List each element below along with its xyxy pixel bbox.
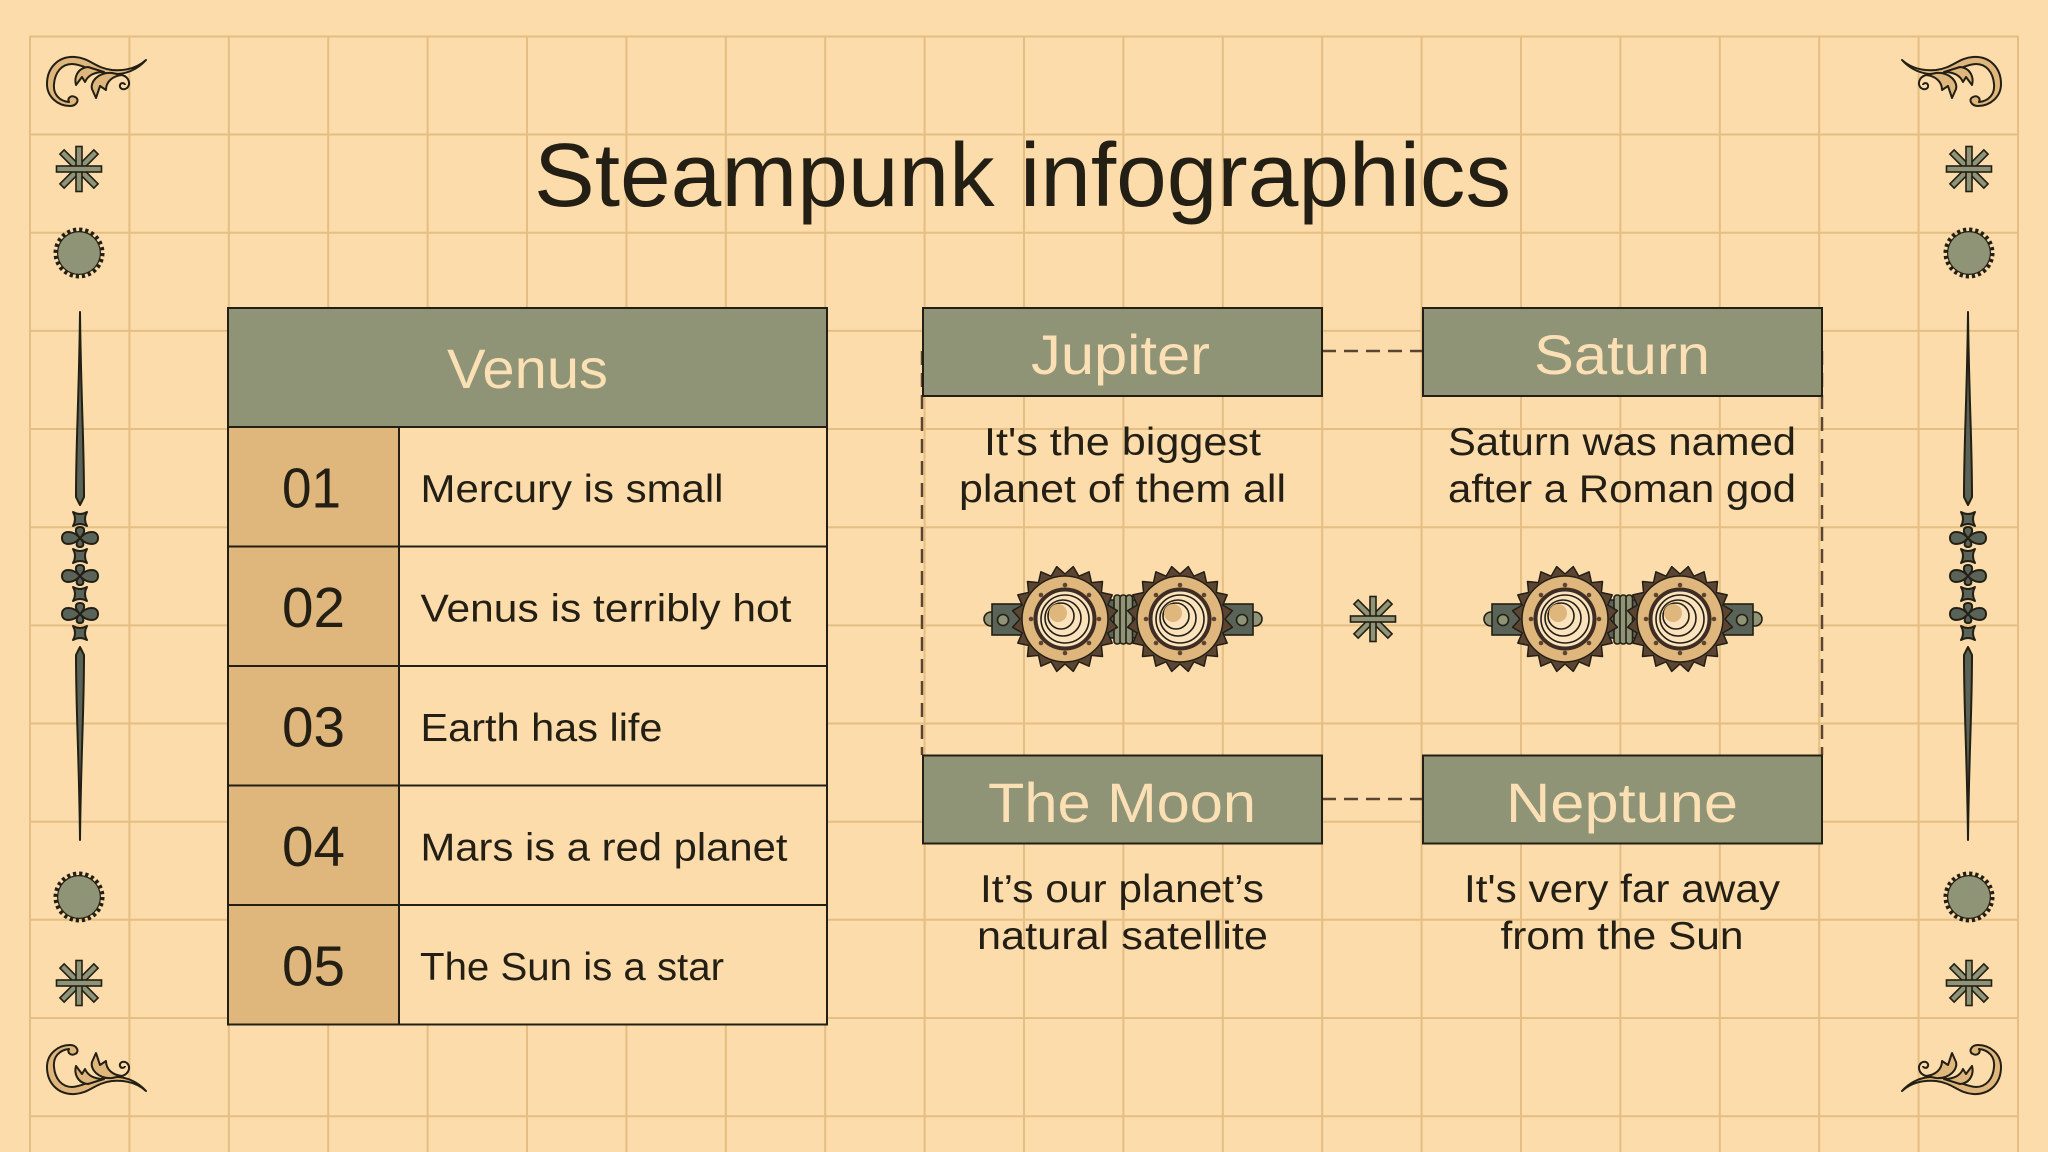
Saturn header: Saturn (1534, 323, 1710, 386)
Jupiter description: It's the biggest (984, 421, 1261, 464)
Neptune header: Neptune (1506, 771, 1738, 834)
Saturn description: after a Roman god (1448, 468, 1796, 511)
table row 05: 05 (282, 934, 345, 998)
table row 04: Mars is a red planet (420, 826, 788, 870)
ornamental spine left (62, 312, 98, 840)
icon: flourish top left (47, 57, 146, 106)
icon: flourish top right (1902, 57, 2001, 106)
Neptune description: It's very far away (1464, 868, 1781, 911)
Neptune header (1423, 756, 1822, 844)
icon: star top left (56, 146, 102, 192)
Jupiter description (959, 421, 1286, 511)
icon: star bottom right (1946, 960, 1992, 1006)
icon: cog bottom left (56, 874, 102, 920)
icon: goggles left (984, 567, 1262, 671)
table row 01: Mercury is small (420, 468, 724, 511)
table row 03 (228, 666, 827, 786)
icon: cog top right (1946, 230, 1992, 276)
table header (228, 308, 827, 427)
Neptune description: from the Sun (1500, 915, 1744, 958)
icon: star bottom left (56, 960, 102, 1006)
The Moon description (977, 868, 1268, 958)
table row 02: Venus is terribly hot (420, 588, 792, 630)
Neptune description (1464, 868, 1781, 958)
Jupiter header (923, 308, 1322, 396)
right ornament column (1902, 57, 2001, 1094)
icon: flourish bottom left (47, 1045, 146, 1094)
Saturn header (1423, 308, 1822, 396)
Jupiter description: planet of them all (959, 468, 1286, 511)
icon: cog bottom right (1946, 874, 1992, 920)
table row 03: 03 (282, 696, 345, 760)
title: Steampunk infographics (534, 126, 1511, 226)
table row 02 (228, 546, 827, 666)
The Moon header (923, 756, 1322, 844)
The Moon description: It’s our planet’s (980, 868, 1264, 911)
panel: The Moon (923, 756, 1322, 958)
icon: star top right (1946, 146, 1992, 192)
ornamental spine right (1950, 312, 1986, 840)
table row 04 (228, 786, 827, 905)
table row 02: 02 (282, 576, 345, 640)
table row 03: Earth has life (420, 707, 662, 750)
table row 01: 01 (282, 456, 341, 520)
icon: center star (1350, 596, 1396, 642)
dashed connectors (922, 351, 1822, 799)
icon: goggles right (1484, 567, 1762, 671)
table header: Venus (447, 337, 608, 400)
The Moon header: The Moon (988, 771, 1256, 834)
left ornament column (47, 57, 146, 1094)
icon: cog top left (56, 230, 102, 276)
Saturn description (1448, 421, 1796, 511)
panel: Neptune (1423, 756, 1822, 958)
Jupiter header: Jupiter (1031, 323, 1210, 386)
table row 01 (228, 427, 827, 546)
panel: Venus table (228, 308, 827, 1024)
table row 05 (228, 905, 827, 1024)
table row 04: 04 (282, 815, 345, 879)
panel: Jupiter (923, 308, 1322, 511)
panel: Saturn (1423, 308, 1822, 511)
icon: flourish bottom right (1902, 1045, 2001, 1094)
table row 05: The Sun is a star (420, 946, 724, 989)
The Moon description: natural satellite (977, 915, 1268, 958)
Saturn description: Saturn was named (1448, 421, 1796, 464)
